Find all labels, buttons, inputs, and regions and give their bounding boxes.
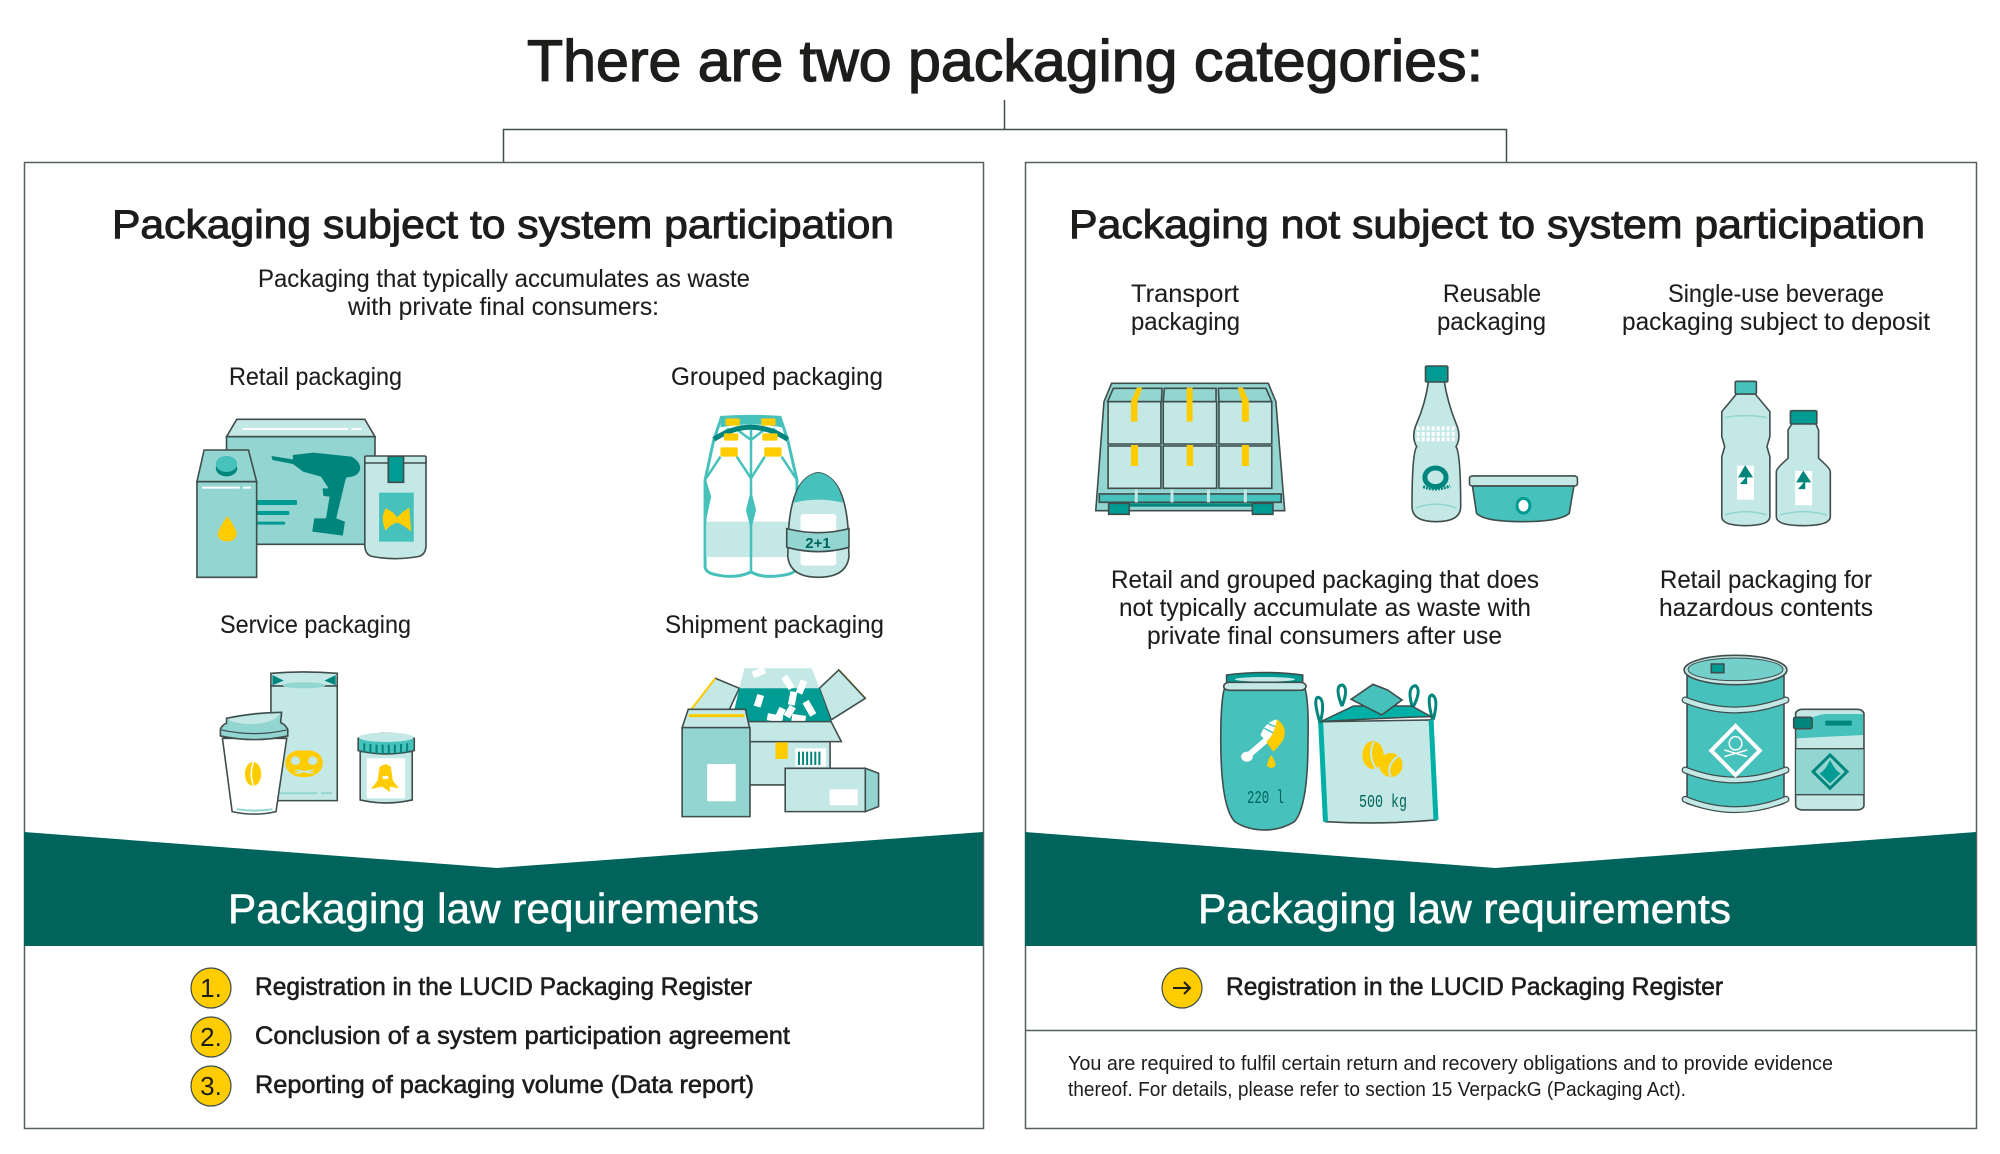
icon: transport packaging illustration — [1096, 383, 1285, 514]
panel heading: Packaging not subject to system participation — [1069, 203, 1925, 247]
panel band: packaging law requirements: Packaging law requirements — [1198, 885, 1731, 932]
icon: deposit bottles illustration — [1722, 381, 1830, 526]
label: service packaging: Service packaging — [220, 611, 411, 639]
label: transport packaging: Transport — [1131, 280, 1239, 308]
label: retail packaging: Retail packaging — [229, 363, 402, 391]
note: return and recovery obligations: You are required to fulfil certain return and recovery obligations and to provide evidence — [1068, 1053, 1833, 1075]
requirement: registration with arrow icon — [1162, 968, 1723, 1008]
label: retail and grouped packaging not accumulating with private consumers: private final consumers after use — [1147, 622, 1502, 650]
title: There are two packaging categories: — [527, 29, 1483, 94]
requirement 3 — [191, 1066, 754, 1106]
panel: packaging subject to system participation — [24, 162, 984, 1128]
requirement 2: 2. — [200, 1022, 222, 1052]
label: transport packaging: packaging — [1131, 308, 1240, 336]
icon: shipment packaging illustration — [682, 668, 879, 817]
panel heading: Packaging subject to system participation — [112, 203, 894, 247]
panel: packaging not subject to system participation — [1025, 162, 1976, 1128]
note: return and recovery obligations: thereof. For details, please refer to section 15 VerpackG (Packaging Act). — [1068, 1079, 1686, 1101]
requirement 1: Registration in the LUCID Packaging Register — [255, 973, 752, 1001]
label: retail packaging for hazardous contents — [1659, 566, 1873, 622]
label: grouped packaging: Grouped packaging — [671, 363, 883, 391]
intro text: Packaging that typically accumulates as waste — [258, 265, 750, 293]
panel band: packaging law requirements — [24, 832, 983, 946]
connector bracket between title and panels — [504, 100, 1506, 162]
label: reusable packaging: packaging — [1437, 308, 1546, 336]
requirement 2: Conclusion of a system participation agreement — [255, 1022, 790, 1050]
panel band: packaging law requirements — [1025, 832, 1976, 946]
label: retail packaging for hazardous contents: Retail packaging for — [1660, 566, 1872, 594]
icon: hazardous contents drum and canister illustration — [1684, 655, 1864, 812]
label: shipment packaging: Shipment packaging — [665, 611, 884, 639]
label: single-use beverage packaging subject to deposit: packaging subject to deposit — [1622, 308, 1930, 336]
intro text — [258, 265, 750, 321]
intro text: with private final consumers: — [347, 293, 659, 321]
requirement 3: 3. — [200, 1071, 222, 1101]
label: reusable packaging: Reusable — [1443, 280, 1541, 308]
icon: retail packaging illustration — [197, 419, 426, 577]
label: reusable packaging — [1437, 280, 1546, 336]
text: 2+1 offer on bottle: 2+1 — [805, 535, 831, 552]
requirement 3: Reporting of packaging volume (Data report) — [255, 1071, 754, 1099]
label: retail and grouped packaging not accumulating with private consumers: Retail and grouped packaging that does — [1111, 566, 1539, 594]
icon: barrel and big bag illustration — [1221, 672, 1436, 830]
label: retail and grouped packaging not accumulating with private consumers: not typically accumulate as waste with — [1119, 594, 1531, 622]
icon: reusable bottle and bowl illustration — [1412, 366, 1577, 522]
panel band: packaging law requirements: Packaging law requirements — [228, 885, 759, 932]
icon: service packaging illustration — [220, 672, 414, 814]
label: transport packaging — [1131, 280, 1240, 336]
label: retail packaging for hazardous contents: hazardous contents — [1659, 594, 1873, 622]
text: 500 kg on bag: 500 kg — [1359, 793, 1407, 813]
text: 220 l on barrel: 220 l — [1247, 789, 1284, 809]
note: return and recovery obligations — [1068, 1053, 1833, 1101]
label: single-use beverage packaging subject to deposit: Single-use beverage — [1668, 280, 1884, 308]
requirement: registration with arrow icon: Registration in the LUCID Packaging Register — [1226, 973, 1723, 1001]
icon: grouped packaging illustration — [705, 416, 849, 577]
requirement 2 — [191, 1017, 790, 1057]
requirement 1 — [191, 968, 752, 1008]
label: single-use beverage packaging subject to deposit — [1622, 280, 1930, 336]
label: retail and grouped packaging not accumulating with private consumers — [1111, 566, 1539, 650]
requirement 1: 1. — [200, 973, 222, 1003]
